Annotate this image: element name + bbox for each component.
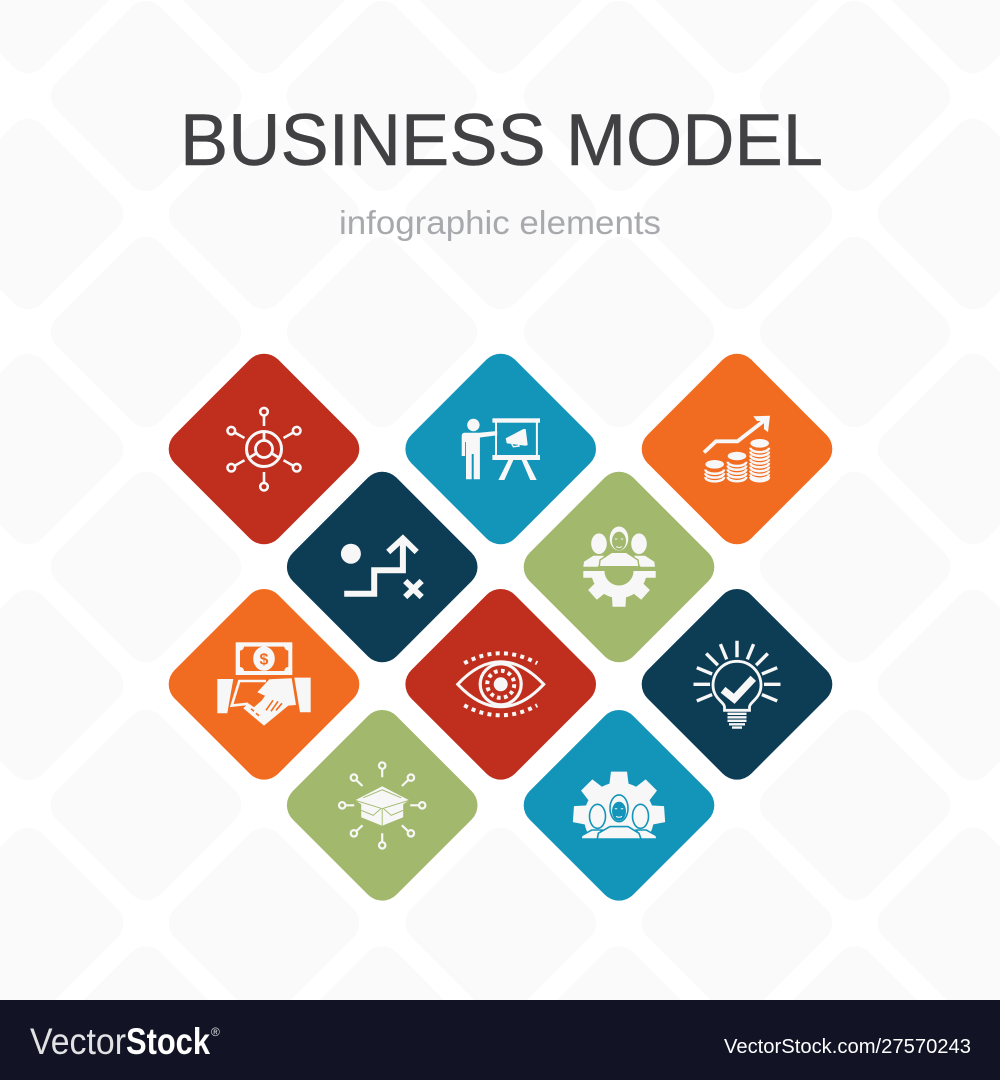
footer logo <box>30 1021 220 1062</box>
icon: team in front of gear <box>573 772 665 854</box>
icon: team above half gear <box>583 526 656 607</box>
footer image id: VectorStock.com/27570243 <box>724 1036 971 1058</box>
icon: open box with radiating nodes <box>339 762 425 848</box>
panel: orange growth diamond <box>633 345 841 553</box>
panel: green product diamond <box>279 702 486 909</box>
icon: light bulb with check mark <box>694 641 780 728</box>
panel: teal team gear diamond <box>515 702 723 909</box>
icon: eye with dotted arcs <box>458 653 544 715</box>
panel: red hub diamond <box>160 345 368 553</box>
footer bar <box>0 1000 1000 1080</box>
panel: teal presentation diamond <box>397 345 604 553</box>
panel: navy idea diamond <box>633 581 841 788</box>
panel: red vision diamond <box>397 581 604 788</box>
footer logo: Stock <box>126 1021 210 1062</box>
footer logo: ® <box>211 1025 220 1039</box>
panel: orange deal diamond <box>160 581 368 788</box>
icon: banknote and handshake: $ <box>260 651 269 668</box>
icon: banknote and handshake <box>217 642 311 726</box>
title: BUSINESS MODEL <box>180 100 823 181</box>
footer logo: Vector <box>30 1021 126 1062</box>
icon: steps, arrow, circle and cross <box>341 538 422 597</box>
subtitle: infographic elements <box>339 204 661 241</box>
icon: presenter with board and megaphone <box>462 418 540 480</box>
icon: network hub <box>228 408 300 490</box>
icon: coin stacks with rising arrow <box>704 416 770 481</box>
panel: green team gear diamond <box>515 463 723 671</box>
panel: navy strategy diamond <box>279 463 486 671</box>
